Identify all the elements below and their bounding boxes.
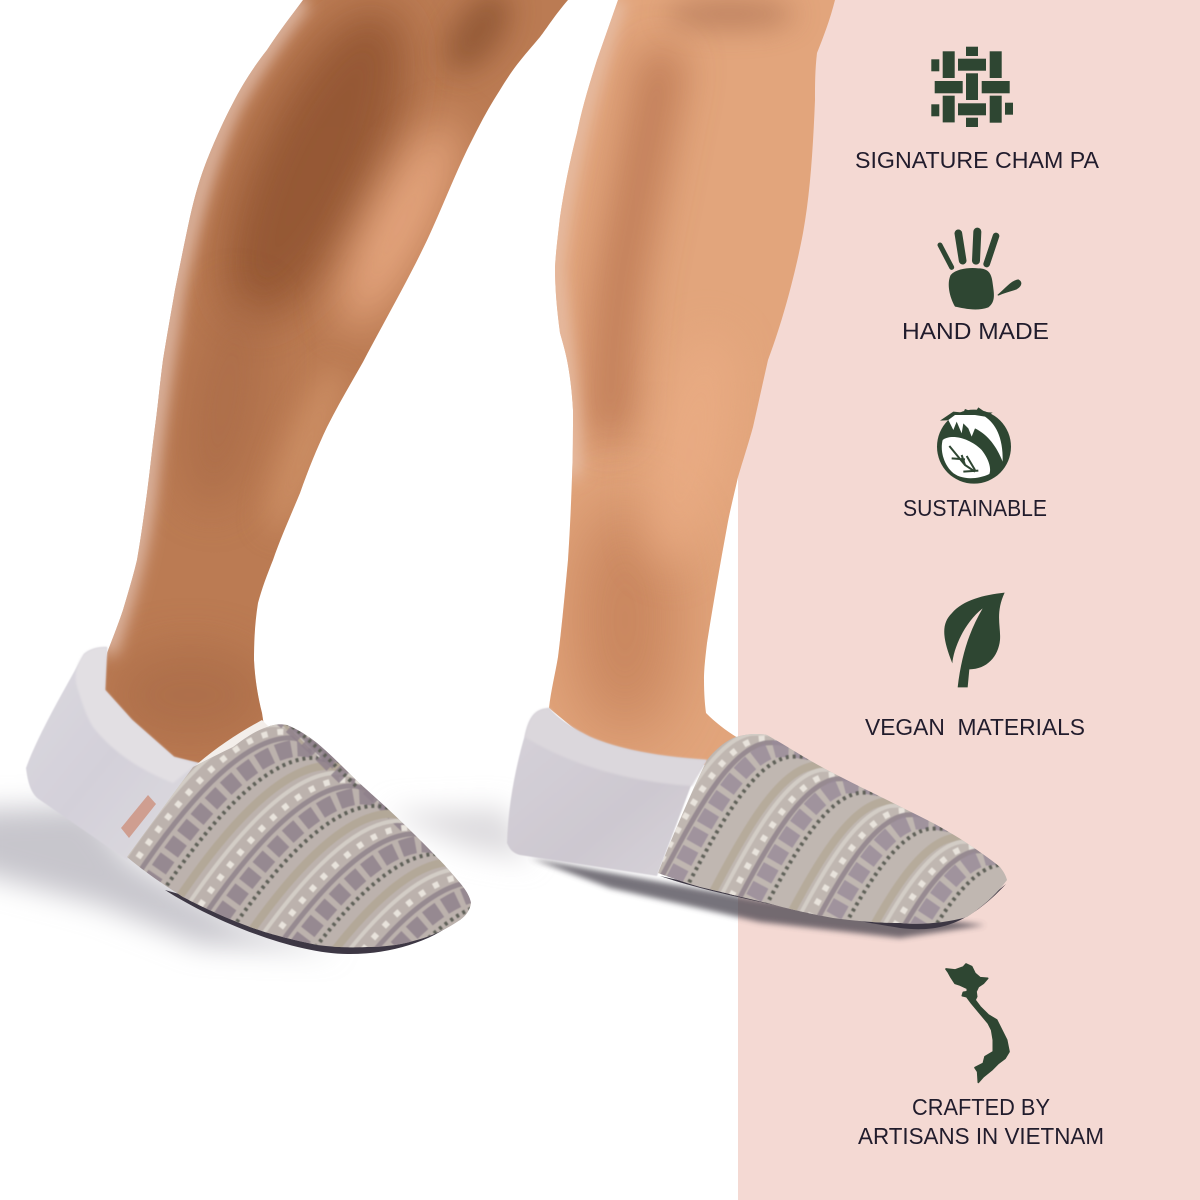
- leg: left: [90, 0, 580, 800]
- sherpa lining: left: [195, 720, 268, 766]
- feature: crafted in vietnam: [858, 964, 1104, 1149]
- feature: vegan materials: [865, 593, 1085, 740]
- feature: hand made: [902, 232, 1049, 344]
- slipper: right foot: [506, 707, 1007, 942]
- fleece collar: left: [76, 647, 197, 783]
- label: crafted by artisans in vietnam: ARTISANS IN VIETNAM: [858, 1123, 1104, 1149]
- pink label: [121, 795, 156, 838]
- feature: sustainable: [903, 407, 1047, 521]
- label: vegan materials: VEGAN MATERIALS: [865, 714, 1085, 740]
- panel: pink features column: [738, 0, 1200, 1200]
- patterned upper: left: [127, 724, 471, 948]
- slipper: left foot: [26, 646, 471, 954]
- icon: circled leaf: [937, 407, 1011, 484]
- icon: leaf: [944, 593, 1005, 687]
- leg: right: [549, 0, 835, 765]
- icon: basket weave: [931, 47, 1013, 127]
- icon: hand print: [940, 232, 1021, 309]
- label: sustainable: SUSTAINABLE: [903, 495, 1047, 521]
- patterned upper: right: [658, 734, 1007, 924]
- label: crafted by artisans in vietnam: [858, 1094, 1104, 1149]
- fleece heel: left: [26, 647, 200, 860]
- sole: right: [660, 876, 1006, 929]
- icon: vietnam map: [946, 964, 1009, 1082]
- fleece heel: right: [507, 708, 707, 876]
- label: crafted by artisans in vietnam: CRAFTED BY: [912, 1094, 1050, 1120]
- floor shadow: right foot: [530, 858, 985, 938]
- label: signature cham pa: SIGNATURE CHAM PA: [855, 147, 1100, 173]
- feature: signature cham pa: [855, 47, 1100, 173]
- floor shadow: left: [0, 805, 530, 950]
- label: hand made: HAND MADE: [902, 318, 1049, 344]
- sole: left: [165, 890, 471, 954]
- fleece collar: right: [525, 708, 707, 786]
